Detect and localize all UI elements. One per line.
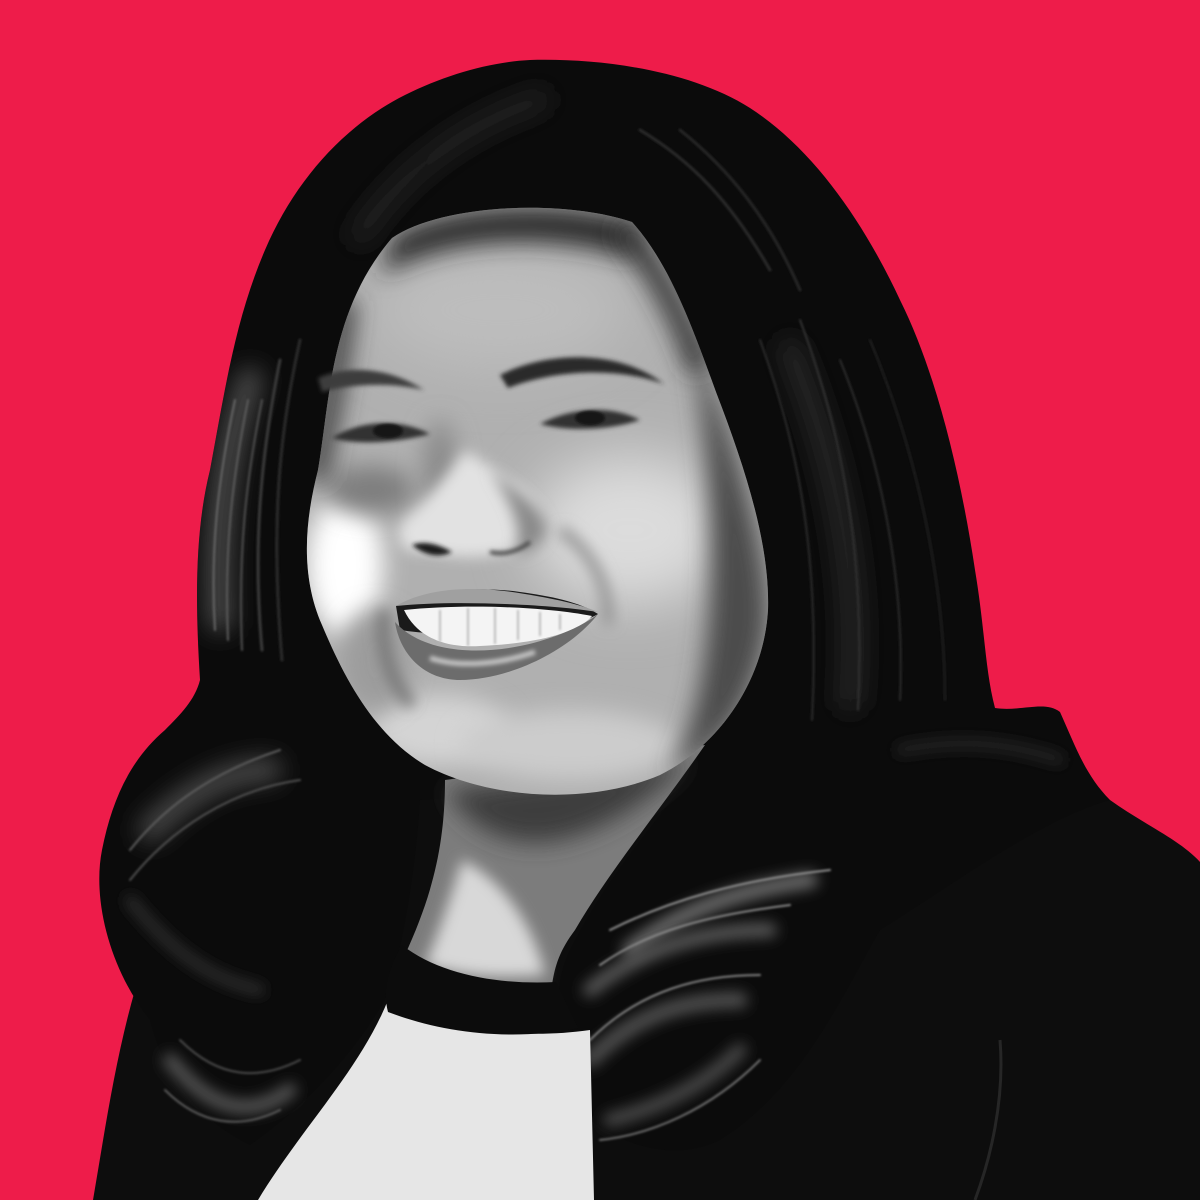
collar (386, 945, 578, 1035)
neck (405, 745, 705, 985)
white shirt (258, 1000, 594, 1200)
hair highlights (130, 100, 1060, 1140)
face (307, 208, 768, 795)
face shading (360, 260, 607, 360)
nose (399, 450, 540, 557)
smile lines (383, 610, 412, 705)
hair (99, 60, 1110, 1150)
eyes (332, 423, 430, 442)
eyebrows (318, 370, 424, 392)
mouth (395, 589, 598, 680)
blazer (93, 740, 1200, 1200)
